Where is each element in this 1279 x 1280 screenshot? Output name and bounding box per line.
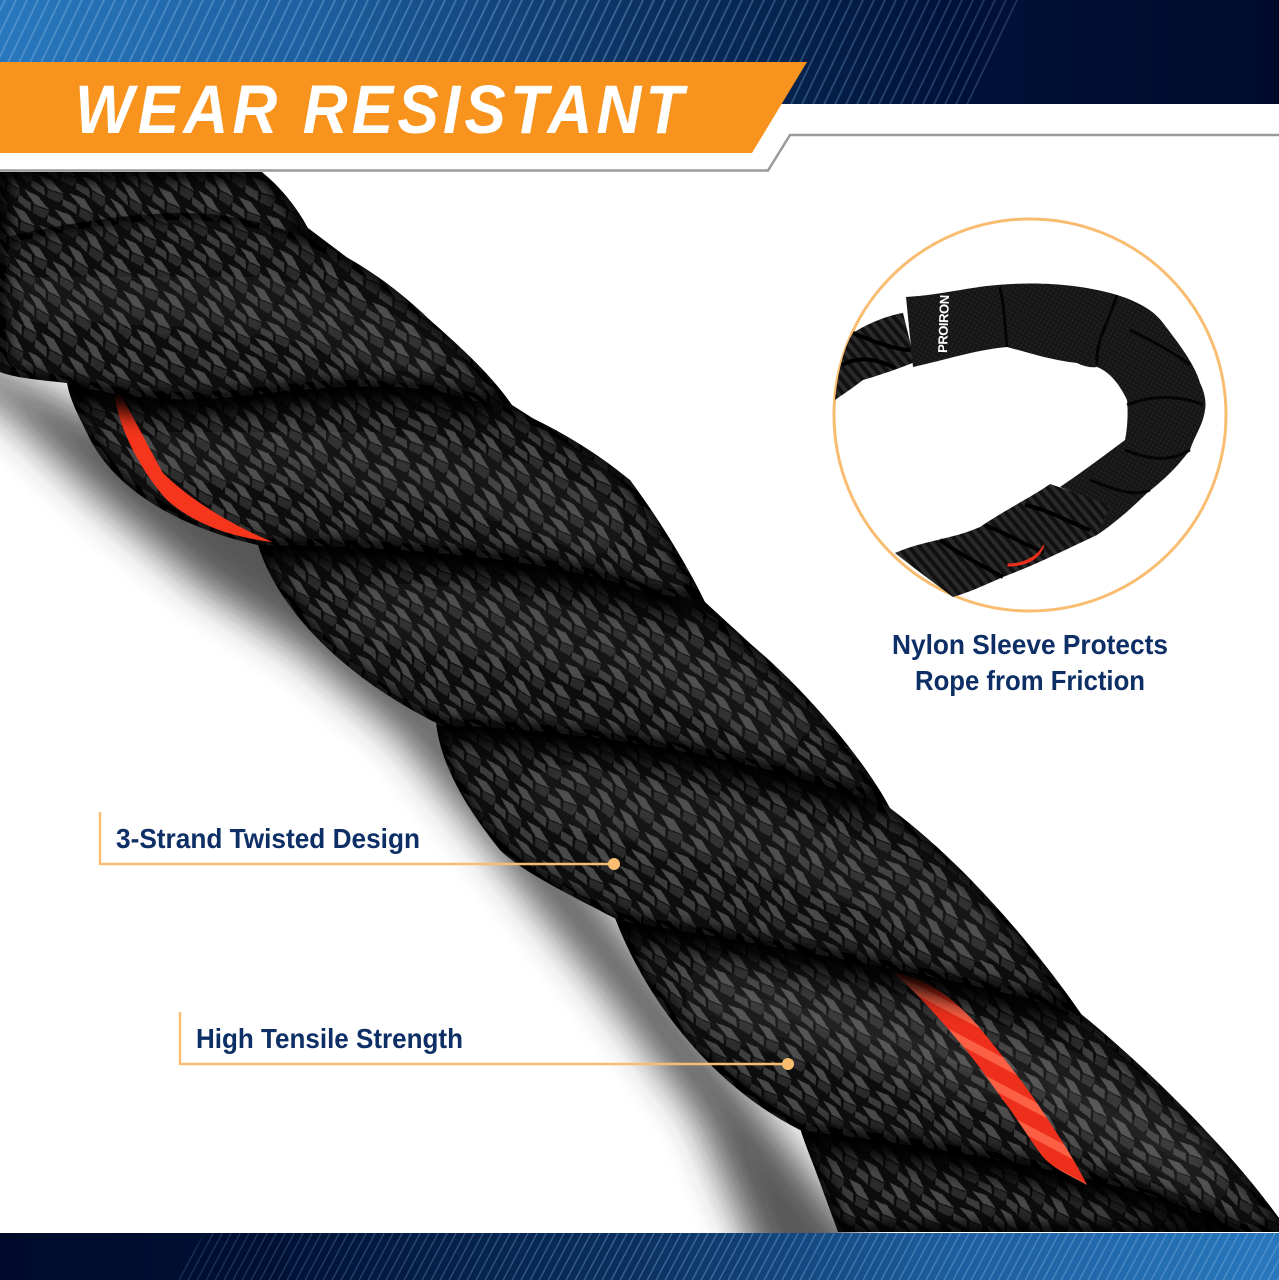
- rope strand 6: [600, 900, 1279, 1240]
- rope strand 1: [1, 172, 308, 237]
- title: WEAR RESISTANT: [75, 71, 688, 148]
- rope strand 5: [420, 700, 1100, 1030]
- nylon sleeve: [906, 283, 1205, 535]
- callout: high tensile strength: [180, 1012, 794, 1070]
- red tracer strand middle: [605, 470, 679, 593]
- inset red tracer: [1008, 545, 1044, 566]
- inset rope lower end: [895, 484, 1112, 597]
- inset rope upper end: [835, 313, 915, 400]
- inset caption: [892, 629, 1168, 696]
- rope strand 2: [0, 205, 520, 415]
- bottom footer band: [0, 1233, 1279, 1280]
- callout: 3-strand twisted design: [100, 812, 620, 870]
- sleeve logo: PROIRON: [935, 295, 952, 353]
- callout: 3-strand twisted design: 3-Strand Twisted Design: [116, 823, 420, 854]
- callout: high tensile strength: High Tensile Strength: [196, 1023, 463, 1054]
- inset: nylon sleeve: [834, 219, 1226, 611]
- rope strand 7: [800, 1130, 1188, 1232]
- top header band: [0, 0, 1279, 104]
- header grey rule: [0, 135, 1279, 170]
- inset caption: Nylon Sleeve Protects: [892, 629, 1168, 660]
- inset caption: Rope from Friction: [915, 665, 1145, 696]
- red tracer strand upper: [115, 390, 273, 542]
- red tracer strand lower: [892, 972, 1087, 1185]
- orange title banner: [0, 62, 807, 153]
- rope drop shadow: [0, 340, 900, 1280]
- inset circle: [834, 219, 1226, 611]
- rope strand 4: [258, 546, 890, 830]
- rope strand 3: [50, 370, 720, 610]
